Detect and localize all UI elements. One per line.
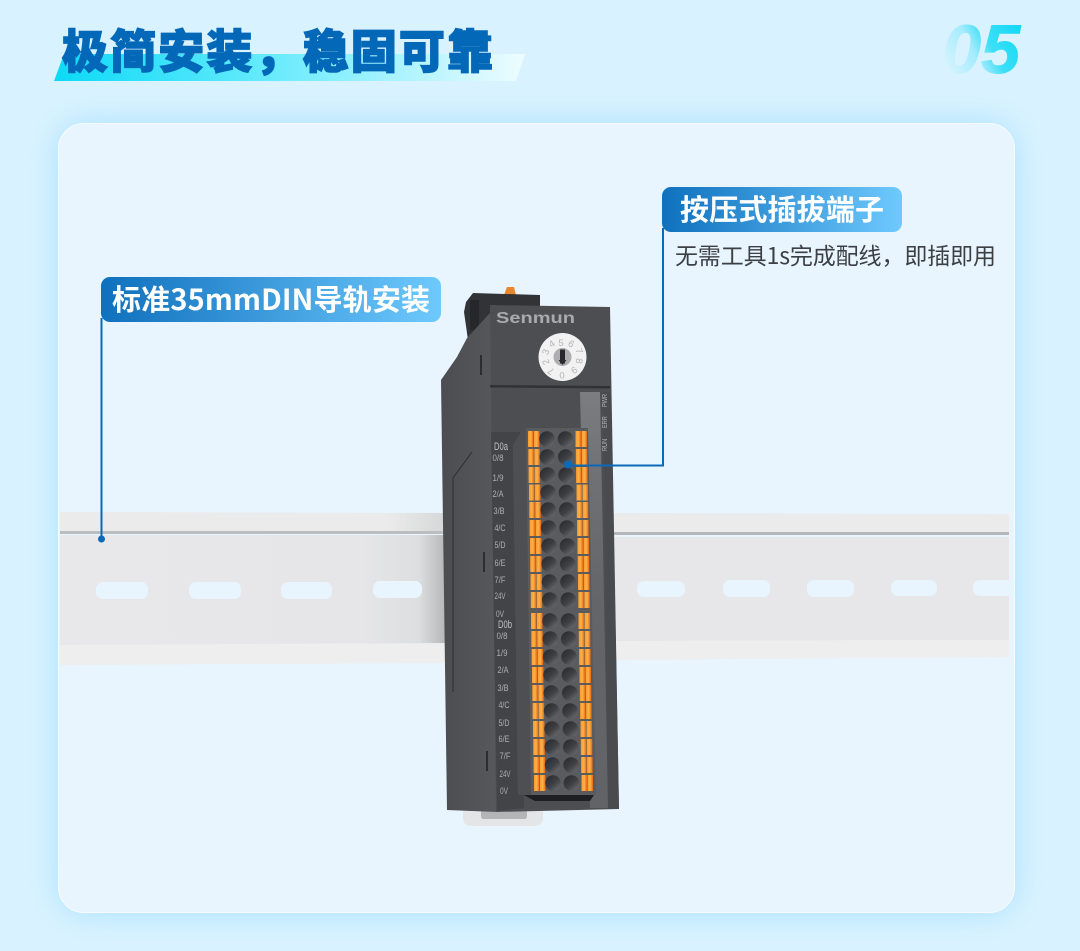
rotary dial: 3 [540,348,553,357]
channel labels: 24V [500,769,510,779]
channel labels: 6/E [494,558,506,568]
callout: push-in terminal [564,187,996,468]
rotary dial: 7 [546,365,557,377]
title banner [54,16,525,82]
channel labels: 0V [496,609,504,619]
channel labels: D0a [494,441,509,453]
rotary dial: 2 [540,357,553,366]
channel labels: 2/A [498,665,508,675]
label text: 按压式插拔端子 [680,187,884,229]
DIN rail: left section [60,512,446,665]
I/O module [441,287,619,826]
channel labels: 7/F [500,751,511,761]
rotary dial: 4 [547,338,558,350]
rotary dial: 5 [558,338,564,349]
leader line [100,318,102,539]
bottom clip [463,806,543,826]
card glow [58,123,1015,913]
channel labels: 7/F [494,575,506,585]
channel labels: 4/C [498,700,510,710]
label text: 标准35mmDIN导轨安装 [112,277,430,319]
channel labels: 0V [500,786,508,796]
status labels: RUN [601,439,609,451]
leader dot [564,460,572,468]
label background [101,277,441,322]
rotary dial: 6 [566,338,576,351]
face divider [490,385,610,388]
channel labels [492,441,512,796]
terminal rows [528,431,593,791]
rail slots [96,581,422,599]
right stripe [580,392,608,808]
leader line [568,228,663,466]
rotary dial [538,333,586,381]
channel labels: 0/8 [492,453,504,463]
side slots [453,355,487,771]
leader dot [98,536,105,542]
channel labels: 5/D [498,718,510,728]
title: 极简安装，稳固可靠 [62,16,493,82]
label background [662,187,902,232]
channel labels: 3/B [494,506,504,516]
title highlight band [54,54,525,81]
right edge [603,392,619,809]
channel labels: 1/9 [492,473,504,483]
brand logo: Senmun [496,310,575,327]
top connector [464,287,540,340]
module side [441,305,497,812]
channel labels: 5/D [494,540,506,550]
status labels: ERR [601,416,609,428]
channel labels: 4/C [494,523,506,533]
description: 无需工具1s完成配线，即插即用 [675,237,996,271]
channel labels: 0/8 [496,631,508,641]
channel labels: 6/E [498,734,510,744]
channel labels: 2/A [492,489,504,499]
push-in terminal block [513,428,596,795]
DIN rail: right section [613,513,1009,660]
section number: 05 [942,11,1022,88]
rotary dial: 7 [572,347,585,356]
rotary dial: 9 [568,364,579,376]
channel labels: D0b [498,619,512,631]
rail slots [637,580,1009,597]
module front face [490,305,619,812]
channel labels: 24V [494,591,506,601]
channel labels: 1/9 [496,648,508,658]
rotary dial: 8 [573,357,584,364]
callout: DIN rail [98,277,441,542]
status labels: PWR [601,394,609,407]
rotary dial: 0 [559,369,565,380]
panel: main card [58,124,1014,912]
status labels [601,394,609,451]
channel labels: 3/B [498,683,508,693]
terminal shadow [518,792,596,801]
label strip [491,432,524,811]
